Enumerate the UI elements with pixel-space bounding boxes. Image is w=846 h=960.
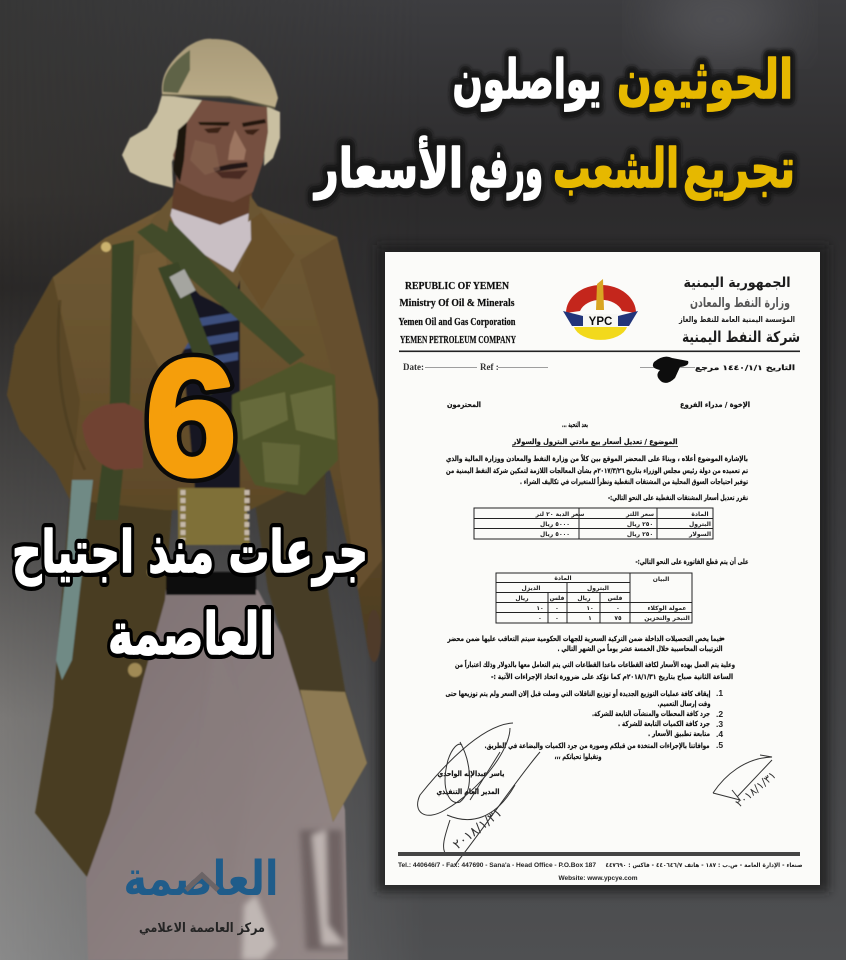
document header: English letterhead: Yemen Oil and Gas Corporation [398, 317, 516, 328]
title line 2: تجريع [683, 137, 795, 200]
table: invoice margins: البيان [653, 576, 669, 583]
table: invoice margins: المادة [554, 575, 572, 582]
table: invoice margins: التبخر والتخزين [644, 615, 690, 622]
coat lower left [35, 470, 175, 877]
table: invoice margins: ٠ [555, 615, 559, 622]
table: invoice margins: ٠ [616, 605, 620, 612]
coat lower right [250, 470, 367, 822]
document salutation and subject: الإخوة / مدراء الفروع [680, 401, 750, 409]
coat upper with sleeves [7, 205, 382, 650]
date and reference line: Date: [403, 362, 424, 372]
caption: doses since capital invasion: العاصمة [108, 600, 274, 668]
document numbered list [446, 688, 723, 761]
document header: Arabic letterhead: وزارة النفط والمعادن [690, 296, 790, 311]
table: fuel prices: المادة [691, 511, 709, 518]
table: invoice margins: ٧٥ [614, 615, 622, 622]
title line 1: الحوثيون [617, 48, 793, 111]
document header: English letterhead: YEMEN PETROLEUM COMPANY [400, 335, 517, 346]
document numbered list: متابعة تطبيق الأسعار . [648, 729, 710, 738]
document body paragraph: تم تعميده من دولة رئيس مجلس الوزراء بتاريخ ٢٠١٧/٣/٢٦م بشأن المعالجات اللازمة لتمكين شركة النفط اليمنية من [446, 466, 748, 475]
signatory block: المدير العام التنفيذي [436, 788, 500, 796]
sheath at waist [56, 480, 93, 680]
coat collar at neck [150, 195, 262, 232]
title line 2 [313, 136, 795, 200]
icon: YPC logo [563, 279, 638, 340]
table: fuel prices: ٢٥٠ ريال [627, 531, 653, 538]
document notes: فيما يخص التحصيلات الداخلة ضمن التركية السعرية للجهات الحكومية سيتم التعاقب عليها ضمن محضر [447, 635, 723, 643]
signature: right [713, 755, 779, 810]
document salutation and subject: المحترمون [447, 401, 481, 409]
document footer [398, 852, 803, 882]
dagger belt and ornate panel [178, 488, 250, 545]
shoulder straps [95, 240, 134, 520]
table: invoice margins: ١ [588, 615, 592, 622]
title line 2: الأسعار [313, 136, 463, 200]
document footer: Website: www.ypcye.com [558, 875, 638, 882]
document numbered list: .1 [716, 688, 723, 698]
title backdrop glow: تجريع [683, 137, 795, 200]
logo: Al-Asima media center: العاصمة [124, 851, 278, 907]
table: invoice margins: البترول [587, 585, 609, 592]
table: invoice margins: ١٠ [536, 605, 544, 612]
title backdrop glow [313, 48, 795, 200]
document header: Arabic letterhead [678, 275, 800, 346]
date and reference line: التاريخ ١٤٤٠/١/١ مرجع [695, 364, 795, 372]
document salutation and subject: بعد التحية ... [562, 421, 588, 429]
signature: right: ٢٠١٨/١/٣١ [733, 769, 779, 810]
table: invoice margins: الديزل [522, 585, 540, 592]
document footer: Tel.: 440646/7 - Fax: 447690 - Sana'a - Head Office - P.O.Box 187 [398, 862, 596, 869]
coat button [101, 242, 111, 252]
caption: doses since capital invasion: جرعات منذ اجتياح [12, 518, 368, 587]
ammunition pouch [232, 362, 338, 495]
caption: doses since capital invasion [12, 518, 368, 668]
hand [82, 403, 143, 470]
table: invoice margins: فلس [608, 595, 623, 602]
big number 6: 6 [145, 326, 237, 511]
document notes: الساعة الثانية صباح بتاريخ ٢٠١٨/١/٣١م كما نؤكد على ضرورة اتخاذ الإجراءات الآتية :- [491, 672, 733, 681]
document body paragraph: توفير احتياجات السوق المحلية من المشتقات النفطية ونظراً للمتغيرات في تكاليف الشراء . [520, 476, 748, 486]
document footer: صنعاء - الإدارة العامة - ص.ب : ١٨٧ - هاتف ٤٤٠٦٤٦/٧ - فاكس : ٤٤٧٦٩٠ [606, 862, 803, 869]
title [313, 48, 795, 200]
table: invoice margins: عمولة الوكلاء [647, 605, 687, 612]
table: invoice margins: ريال [577, 595, 591, 602]
title line 2: الشعب [553, 137, 679, 200]
table: invoice margins [496, 573, 692, 623]
document salutation and subject [447, 401, 750, 447]
table: invoice margins: ٠ [538, 615, 542, 622]
illustration: armed man in coat [7, 39, 382, 960]
table: invoice margins: فلس [550, 595, 565, 602]
document numbered list: إيقاف كافة عمليات التوزيع الجديدة أو توزيع الناقلات التي وصلت قبل إلان السعر ولم يتم توزيعها حتى [446, 689, 710, 698]
document body paragraph [446, 454, 748, 502]
panel: scanned document [377, 245, 829, 892]
caption: doses since capital invasion: العاصمة [108, 600, 274, 668]
logo: Al-Asima media center: مركز العاصمة الاعلامي [139, 921, 265, 936]
document numbered list: وتقبلوا تحياتكم ،،، [554, 753, 602, 761]
document body paragraph: بالإشارة الموضوع أعلاه ، وبناءً على المحضر الموقع بين كلاً من وزارة النفط والمعادن ووزارة المالية والذي [446, 454, 748, 463]
document numbered list: وقت إرسال التعميم. [658, 700, 710, 708]
table: fuel prices: ٥٠٠٠ ريال [540, 531, 570, 538]
signatory block: ياسر عبدالإله الواحدي [438, 770, 505, 778]
neck [170, 170, 252, 225]
document numbered list: .3 [716, 719, 723, 729]
document numbered list: .2 [716, 709, 723, 719]
table: fuel prices: سعر اللتر [625, 511, 654, 518]
document salutation and subject: الموضوع / تعديل أسعار بيع مادتي البترول والسولار [512, 437, 678, 446]
document notes: وعلية يتم العمل بهذه الأسعار لكافة القطاعات ماعدا القطاعات التي يتم التعامل معها بالدولار وذلك اعتباراً من [455, 659, 735, 669]
title backdrop glow: الأسعار [313, 136, 463, 200]
document header: English letterhead: REPUBLIC OF YEMEN [405, 281, 510, 292]
long white robe [86, 590, 348, 960]
document header: Arabic letterhead: المؤسسة اليمنية العامة للنفط والغاز [678, 315, 795, 324]
logo: Al-Asima media center [124, 851, 278, 936]
hat ear flaps [122, 95, 280, 188]
title backdrop glow: الحوثيون [617, 48, 793, 111]
big number 6: 6 [145, 326, 237, 511]
table: fuel prices: البترول [689, 521, 711, 528]
document notes: الترتيبات المحاسبية خلال الخمسة عشر يوماً من الشهر التالي . [558, 643, 722, 653]
panel: scanned document: على أن يتم قطع الفاتورة على النحو التالي:- [636, 557, 749, 566]
date and reference line: Ref : [480, 362, 499, 372]
table: invoice margins: ٠ [555, 605, 559, 612]
document numbered list: جرد كافة المحطات والمنشآت التابعة للشركة. [592, 709, 710, 718]
table: fuel prices: ٥٠٠٠ ريال [540, 521, 570, 528]
title line 1: يواصلون [452, 48, 602, 111]
robe fold shadows and highlights [200, 620, 345, 960]
document numbered list: .5 [716, 740, 723, 750]
signature: left [418, 723, 540, 865]
icon: YPC logo: YPC [589, 316, 612, 328]
title backdrop glow: يواصلون [452, 48, 602, 111]
coat lining [300, 690, 367, 822]
face [173, 100, 268, 202]
table: invoice margins: ١٠ [586, 605, 594, 612]
title backdrop glow: الشعب [553, 137, 679, 200]
title line 2: ورفع [469, 137, 543, 200]
signatory block [436, 770, 505, 796]
caption: doses since capital invasion: جرعات منذ اجتياح [12, 518, 368, 587]
right hand [367, 610, 381, 662]
shirt and sweater [167, 198, 251, 272]
document header: Arabic letterhead: شركة النفط اليمنية [682, 328, 800, 346]
table: invoice margins: ريال [515, 595, 529, 602]
table: fuel prices: ٢٥٠ ريال [627, 521, 653, 528]
document numbered list: جرد كافة الكميات التابعة للشركة . [618, 720, 710, 728]
coat lapels [130, 250, 190, 380]
document numbered list: .4 [716, 729, 723, 739]
title line 1 [452, 48, 793, 111]
document header: English letterhead: Ministry Of Oil & Minerals [400, 298, 514, 309]
table: fuel prices: سعر الدبة ٢٠ لتر [535, 511, 584, 518]
table: fuel prices [474, 508, 713, 539]
coat buttons [128, 663, 142, 677]
date and reference line [403, 357, 795, 383]
hat dome [162, 39, 278, 108]
document notes [447, 635, 735, 681]
signature: left: ٢٠١٨/١/٣١ [451, 806, 505, 853]
document body paragraph: نقرر تعديل أسعار المشتقات النفطية على النحو التالي:- [608, 493, 748, 502]
document numbered list: موافاتنا بالإجراءات المتخذة من قبلكم وصورة من جرد الكميات والبضاعة في الطريق. [484, 742, 710, 750]
document header: Arabic letterhead: الجمهورية اليمنية [684, 275, 790, 291]
table: fuel prices: السولار [688, 531, 711, 538]
title backdrop glow: ورفع [469, 137, 543, 200]
document header: English letterhead [398, 281, 517, 346]
